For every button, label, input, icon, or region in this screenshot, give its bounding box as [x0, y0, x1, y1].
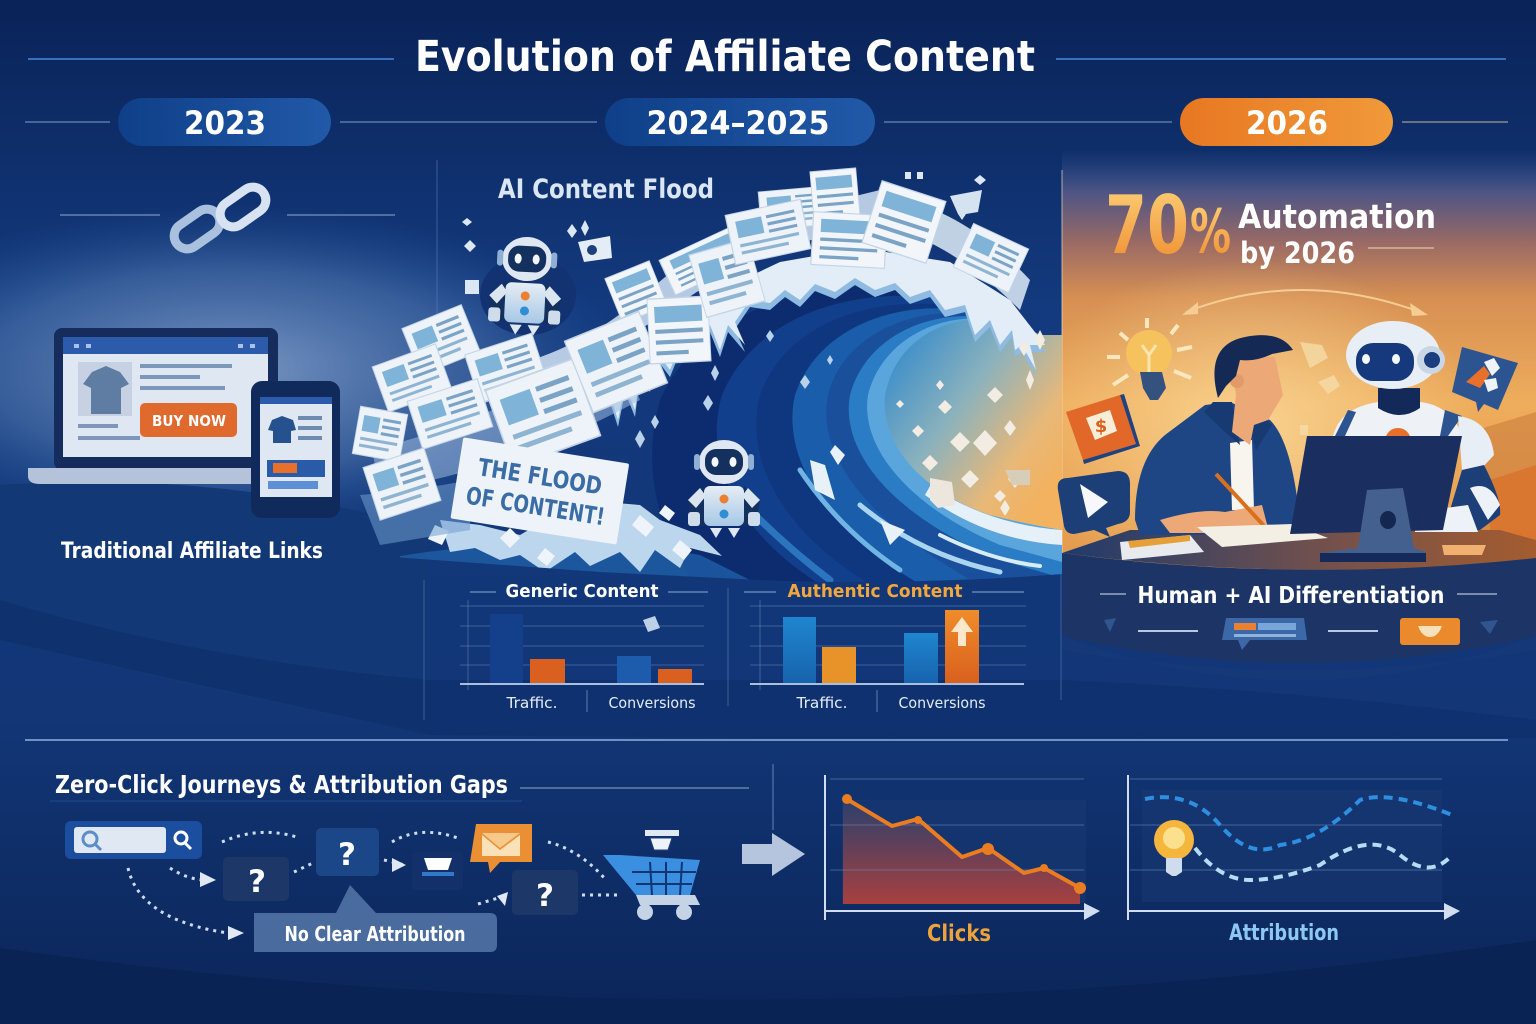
icon: edit tile	[1452, 347, 1518, 412]
column dividers	[424, 160, 1061, 720]
panel: 2026 warm background	[1062, 158, 1536, 663]
chat tile and bits	[950, 190, 982, 220]
timeline pill: 2023: 2023	[184, 104, 266, 142]
crest foam	[600, 248, 1045, 420]
label: traditional affiliate links: Traditional Affiliate Links	[61, 539, 323, 564]
robot: upper	[480, 235, 576, 337]
chart: generic content	[460, 581, 708, 712]
callout: 70% automation by 2026: 70	[1105, 179, 1189, 272]
timeline pill: 2023	[25, 98, 597, 146]
callout: 70% automation by 2026: Automation	[1238, 197, 1436, 236]
timeline pill: 2026	[1180, 98, 1508, 146]
heading: zero-click: Zero-Click Journeys & Attribution Gaps	[55, 770, 508, 799]
divider arrow	[742, 764, 805, 876]
chart: generic content: Traffic.	[505, 694, 558, 712]
icon: play video bubble	[1058, 471, 1130, 537]
foam under the flood sign	[440, 500, 722, 572]
icon: laptop with product page: BUY NOW	[152, 412, 226, 430]
chart: generic content: Conversions	[608, 694, 696, 712]
arrow: human AI exchange	[1182, 290, 1428, 316]
callout: 70% automation by 2026: by 2026	[1240, 236, 1355, 270]
chart: attribution: Attribution	[1229, 921, 1339, 946]
icon: lightbulb	[1107, 318, 1192, 400]
panel: 2026 human + AI	[1058, 179, 1518, 650]
barrel opening	[885, 319, 1062, 530]
icon: shopping cart	[603, 830, 700, 920]
callout: 70% automation by 2026	[1105, 179, 1436, 272]
pale document ribbons	[360, 190, 1030, 545]
callout: no clear attribution: No Clear Attribution	[284, 922, 466, 946]
icon: search bar	[65, 821, 202, 859]
crest foam shadow	[612, 278, 1045, 427]
chart: authentic content	[744, 581, 1026, 712]
icon: question box 3	[512, 870, 578, 915]
spray inside barrel	[896, 330, 1045, 516]
callout: 70% automation by 2026: %	[1190, 197, 1231, 267]
chart: clicks	[825, 775, 1100, 947]
icon: laptop with product page	[28, 328, 278, 484]
timeline pill: 2026: 2026	[1246, 104, 1328, 142]
arrows: dotted journey	[128, 832, 620, 933]
icon: question box 1: ?	[248, 864, 266, 900]
chart: authentic content: Conversions	[898, 694, 986, 712]
icon: email bubble	[470, 824, 532, 873]
illustration: wave	[400, 248, 1062, 590]
sign: the flood of content: OF CONTENT!	[464, 482, 607, 531]
lower-left water base	[400, 548, 749, 580]
icon: question box 3: ?	[536, 878, 554, 914]
chart: clicks: Clicks	[927, 921, 991, 947]
illustration: human at desk	[1135, 335, 1298, 535]
panel: zero-click journeys	[50, 770, 749, 952]
callout: no clear attribution	[254, 885, 497, 952]
title: Evolution of Affiliate Content	[415, 32, 1035, 82]
timeline pill: 2024-2025: 2024–2025	[646, 104, 830, 142]
chart: generic content: Generic Content	[506, 581, 659, 602]
chart: attribution	[1128, 775, 1460, 946]
sign: the flood of content: THE FLOOD	[476, 453, 604, 500]
illustration: robot partner	[1333, 321, 1500, 532]
spray dark zone	[635, 330, 833, 448]
heading: AI content flood: AI Content Flood	[498, 174, 714, 205]
foam streaks	[925, 486, 1062, 545]
panel: AI content flood wave	[352, 168, 1062, 590]
illustration: desk and monitor	[1120, 436, 1486, 562]
icon: question box 2	[316, 828, 379, 876]
icon: dollar book: $	[1095, 416, 1107, 437]
heading: human + AI differentiation: Human + AI Differentiation	[1138, 583, 1444, 609]
paper bits	[1300, 342, 1340, 435]
icon: question box 1	[223, 857, 289, 901]
icon: envelope tile	[412, 852, 463, 890]
panel: 2023 traditional links	[28, 182, 395, 564]
timeline pill: 2024-2025	[605, 98, 1172, 146]
icons: small output cards	[1104, 618, 1498, 650]
chart: authentic content: Authentic Content	[788, 581, 963, 602]
content documents in the flood	[352, 168, 1029, 520]
chart: authentic content: Traffic.	[795, 694, 848, 712]
robot: lower	[688, 440, 760, 538]
icon: dollar book	[1066, 394, 1140, 464]
icon: question box 2: ?	[338, 837, 356, 873]
sign: the flood of content	[450, 437, 629, 545]
icon: phone with product page	[251, 381, 340, 518]
icon: chain link	[60, 182, 395, 254]
